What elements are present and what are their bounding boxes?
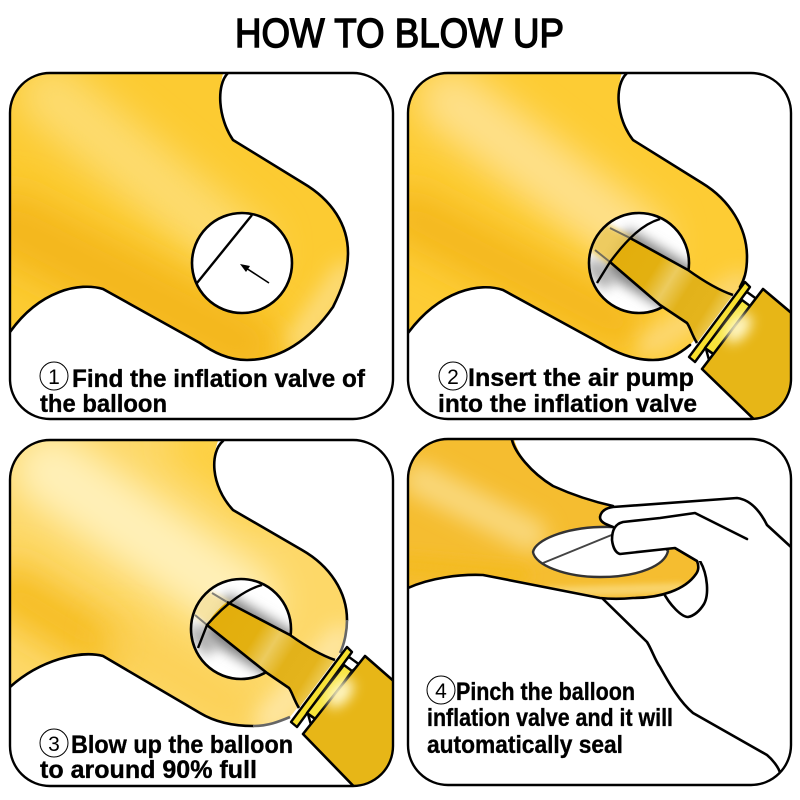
caption: step 1: Find the inflation valve of [72,365,366,393]
pump collar: step 2 [689,282,758,364]
arrow: points at valve [240,264,269,283]
balloon: step 2 [409,74,748,362]
caption: step 2: into the inflation valve [438,390,697,418]
panel: step 2 insert the pump [400,60,800,430]
caption: step 2: Insert the air pump [468,364,694,392]
hand: pinching fingers [600,498,795,561]
valve hole: step 1 [192,213,292,313]
caption: step 3: Blow up the balloon [71,731,293,759]
caption: step 1: 1 [48,366,60,389]
caption: step 3: to around 90% full [40,756,257,784]
pump body: step 2 [700,288,790,418]
balloon: step 4 [409,440,700,600]
hand: thumb and wrist [602,561,780,785]
caption: step 4: inflation valve and it will [427,704,673,732]
panel: step 3 blow up the balloon [0,430,400,800]
valve hole with nozzle shadow: step 3 [188,579,292,679]
pump nozzle: step 2 [597,219,733,343]
pump assembly: step 3 [198,585,360,729]
caption: step 3 [40,729,293,784]
title: HOW TO BLOW UP [235,10,564,56]
panel: step 1 find the valve [0,60,400,419]
balloon: step 1 [11,74,350,362]
caption: step 1: the balloon [40,390,167,418]
pump body: step 3 [302,654,392,785]
panel: step 4 pinch to seal [400,430,795,785]
caption: step 3: 3 [48,733,60,756]
caption: step 2: 2 [447,366,459,389]
valve hole: step 4 [533,527,668,577]
caption: step 4: automatically seal [427,731,623,759]
caption: step 1 [40,362,366,418]
caption: step 4: 4 [435,680,447,703]
valve hole with nozzle shadow: step 2 [586,213,690,313]
caption: step 4 [427,676,673,759]
caption: step 4: Pinch the balloon [456,678,635,706]
caption: step 2 [438,362,697,418]
balloon: step 3 [11,441,348,728]
